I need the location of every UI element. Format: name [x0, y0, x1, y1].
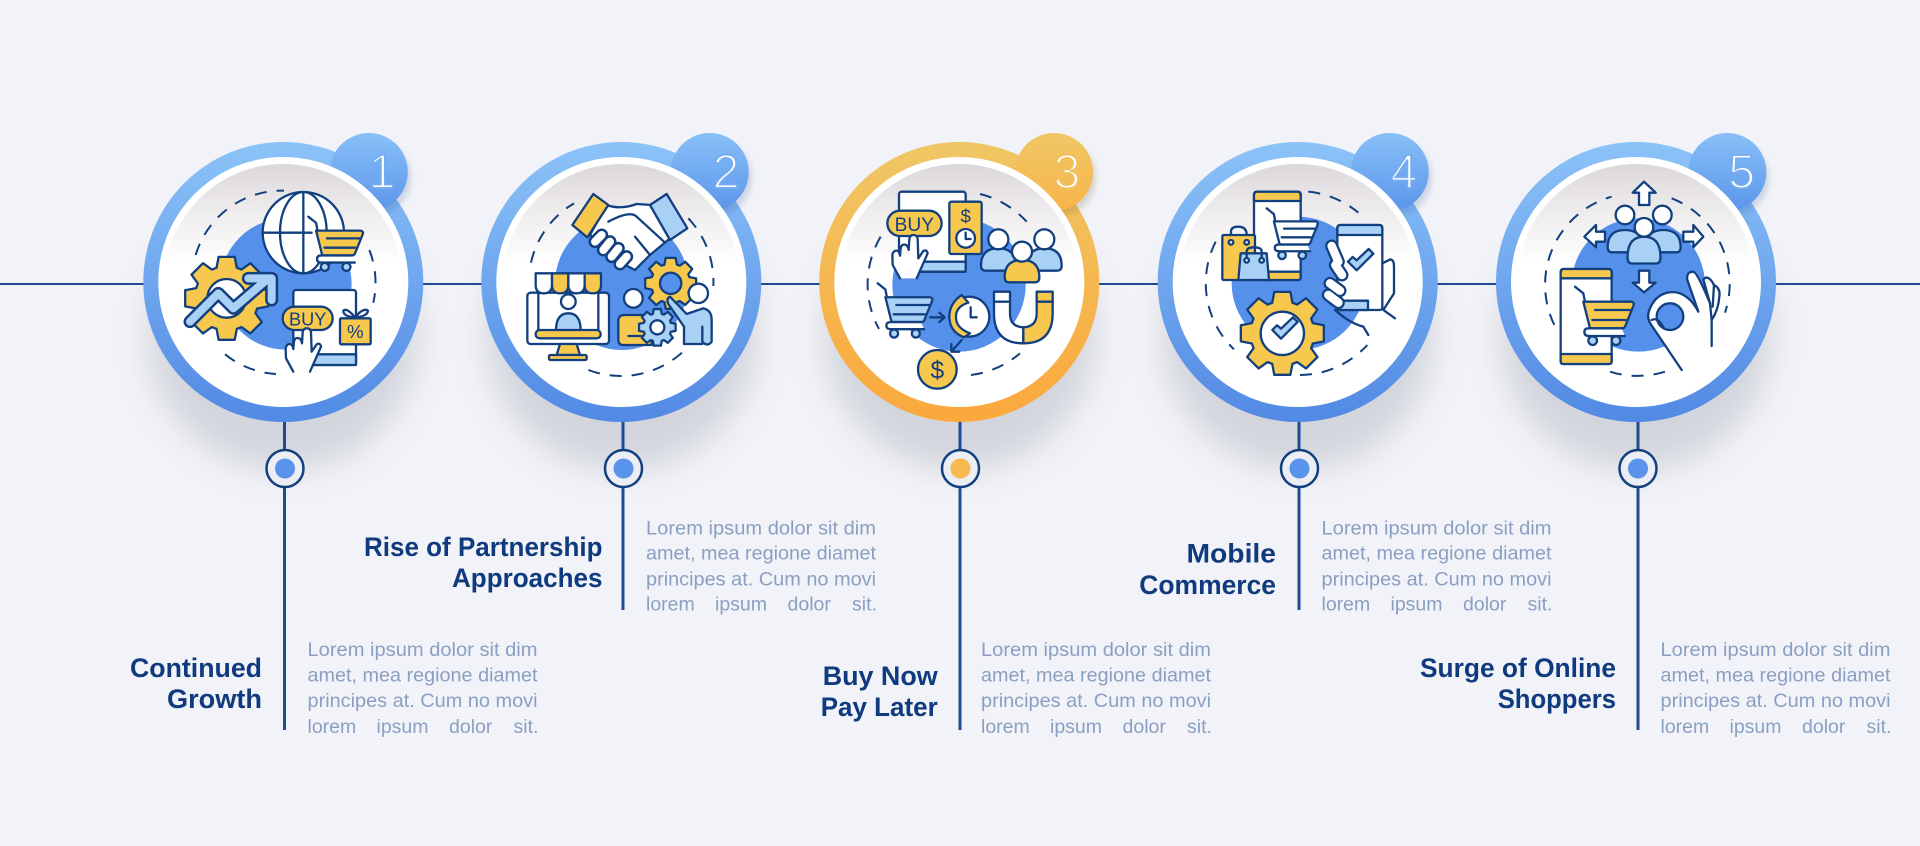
body text 5: sit.: [1866, 716, 1891, 738]
title 5: Surge of Online: [1420, 653, 1616, 683]
icon: global growth and online buying: [185, 191, 376, 374]
body text 3: amet, mea regione diamet: [981, 664, 1212, 686]
body text 1: [308, 639, 538, 738]
body text 4: Lorem ipsum dolor sit dim: [1322, 517, 1552, 539]
title 2: [364, 532, 602, 593]
globe: [263, 192, 344, 273]
tablet: [293, 290, 356, 365]
body text 1: principes at. Cum no movi: [308, 690, 538, 712]
number 5: 5: [1728, 146, 1755, 199]
clock: [949, 295, 989, 337]
body text 4: principes at. Cum no movi: [1322, 568, 1552, 590]
body text 5: amet, mea regione diamet: [1660, 664, 1891, 686]
step 1: [130, 133, 538, 738]
buy button: BUY: [895, 215, 934, 236]
buy button: [887, 211, 942, 236]
connector 2: [605, 420, 642, 610]
number 3: 3: [1054, 146, 1080, 199]
icon: buy now pay later: [868, 192, 1062, 389]
seated person: [618, 289, 652, 345]
cart: [878, 283, 932, 338]
body text 3: sit.: [1187, 716, 1212, 738]
title 4: Commerce: [1139, 570, 1276, 600]
body text 5: [1660, 639, 1891, 738]
step 4: [1139, 133, 1552, 616]
title 1: [130, 653, 262, 714]
title 1: Continued: [130, 653, 262, 683]
body text 1: Lorem ipsum dolor sit dim: [308, 639, 538, 661]
online store monitor: [527, 273, 609, 360]
number 4: 4: [1391, 146, 1417, 199]
body text 4: amet, mea regione diamet: [1322, 543, 1552, 565]
body text 2: amet, mea regione diamet: [646, 543, 877, 565]
connector 5: [1620, 420, 1656, 730]
body text 3: principes at. Cum no movi: [981, 690, 1211, 712]
body text 4: sit.: [1528, 594, 1552, 616]
title 2: Rise of Partnership: [364, 532, 602, 562]
handshake: [572, 194, 687, 270]
body text 2: lorem: [646, 594, 695, 616]
body text 1: lorem: [308, 716, 356, 738]
body text 1: sit.: [514, 716, 538, 738]
connector 3: [942, 420, 979, 730]
gift: [340, 310, 371, 344]
phone: [1561, 269, 1612, 364]
soft shadows below circles: [148, 200, 1771, 470]
body text 3: lorem: [981, 716, 1030, 738]
tablet: [899, 192, 966, 272]
body text 4: ipsum: [1390, 594, 1443, 616]
pointing person: [667, 284, 712, 344]
coin: $: [930, 357, 944, 384]
body text 2: [646, 517, 877, 616]
circle 1: [143, 133, 423, 422]
circle 5: [1496, 133, 1776, 422]
body text 1: ipsum: [376, 716, 429, 738]
title 5: Shoppers: [1498, 684, 1616, 714]
direction arrows: [1584, 182, 1703, 292]
buy button: BUY: [289, 309, 326, 330]
magnet: [994, 292, 1053, 343]
body text 5: principes at. Cum no movi: [1660, 690, 1890, 712]
buy button: [283, 307, 333, 330]
number 2: 2: [713, 146, 739, 199]
hand holding phone: [1328, 225, 1395, 335]
payment card: $: [960, 206, 971, 227]
cart: [1575, 287, 1634, 345]
coin: [918, 350, 957, 389]
body text 5: ipsum: [1730, 716, 1782, 738]
small gear: [639, 309, 676, 346]
body text 4: dolor: [1463, 594, 1507, 616]
body text 5: lorem: [1660, 716, 1709, 738]
title 4: Mobile: [1186, 538, 1276, 568]
customers: [981, 229, 1062, 282]
body text 2: sit.: [852, 594, 877, 616]
body text 3: Lorem ipsum dolor sit dim: [981, 639, 1211, 661]
shopping phone: [1254, 192, 1301, 280]
step 2: [364, 133, 877, 616]
title 3: Pay Later: [821, 692, 938, 722]
body text 1: amet, mea regione diamet: [308, 664, 538, 686]
circle 4: [1158, 133, 1438, 422]
gift: %: [347, 321, 364, 342]
big gear: [645, 258, 696, 309]
body text 5: dolor: [1802, 716, 1846, 738]
OK hand: [1648, 272, 1720, 370]
title 2: Approaches: [452, 563, 602, 593]
hand: [286, 328, 321, 372]
gear with check: [1241, 292, 1324, 375]
icon: surge of online shoppers: [1545, 182, 1730, 376]
body text 1: dolor: [449, 716, 493, 738]
title 5: [1420, 653, 1616, 714]
body text 3: [981, 639, 1212, 738]
body text 4: lorem: [1322, 594, 1370, 616]
title 1: Growth: [167, 684, 262, 714]
circle 2: [481, 133, 761, 422]
step 5: [1420, 133, 1891, 738]
circle 3: [819, 133, 1099, 422]
shopping bags: [1222, 227, 1269, 280]
title 3: Buy Now: [823, 661, 939, 691]
body text 4: [1322, 517, 1552, 616]
body text 2: Lorem ipsum dolor sit dim: [646, 517, 876, 539]
icon: mobile commerce: [1206, 192, 1395, 375]
connector 4: [1281, 420, 1318, 610]
step 3: [819, 133, 1212, 738]
body text 2: principes at. Cum no movi: [646, 568, 876, 590]
title 4: [1139, 538, 1276, 600]
number 1: 1: [369, 146, 395, 199]
body text 2: dolor: [788, 594, 831, 616]
body text 3: dolor: [1122, 716, 1166, 738]
body text 5: Lorem ipsum dolor sit dim: [1660, 639, 1890, 661]
title 3: [821, 661, 939, 722]
gear with arrow: [185, 257, 272, 340]
body text 3: ipsum: [1050, 716, 1102, 738]
hand: [892, 235, 928, 278]
arrows: [930, 313, 962, 352]
cart: [308, 217, 363, 271]
connector 1: [266, 420, 304, 730]
icon: partnership handshake: [527, 194, 713, 376]
payment card: [949, 202, 982, 254]
crowd of shoppers: [1608, 206, 1681, 263]
body text 2: ipsum: [715, 594, 767, 616]
cart: [1267, 208, 1318, 259]
horizontal timeline: [0, 283, 1920, 285]
